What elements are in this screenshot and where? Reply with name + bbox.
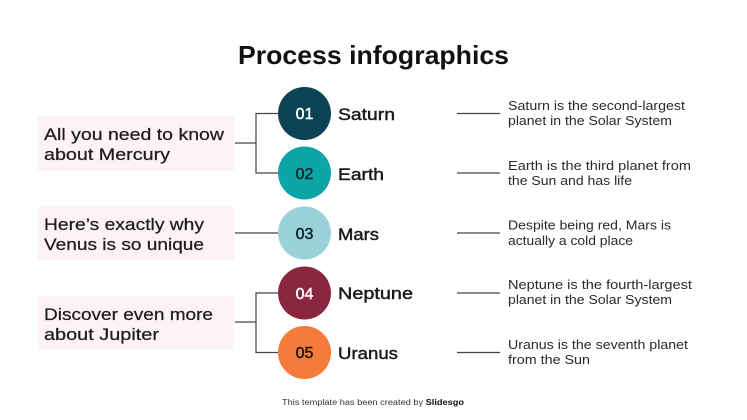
connector: Jupiter to Neptune and Uranus — [235, 293, 278, 352]
connector: Venus to Mars — [235, 232, 278, 234]
panel: Jupiter callout — [38, 296, 234, 350]
description: Neptune: Neptune is the fourth-largest — [508, 277, 692, 292]
panel: Mercury callout: All you need to know — [44, 125, 225, 144]
panel: Mercury callout — [38, 116, 234, 171]
description: Mars: actually a cold place — [508, 233, 633, 248]
description: Neptune: planet in the Solar System — [508, 292, 672, 307]
description: Mars — [457, 218, 672, 248]
description: Neptune — [457, 277, 692, 307]
title: Process infographics — [238, 40, 509, 70]
step 04: Neptune: Neptune — [338, 284, 413, 303]
panel: Venus callout: Venus is so unique — [44, 235, 204, 254]
step 02: Earth: Earth — [338, 165, 384, 184]
step 03: Mars: Mars — [338, 225, 379, 244]
step 05: Uranus: 05 — [296, 345, 314, 362]
panel: Mercury callout: about Mercury — [44, 145, 171, 164]
description: Uranus — [457, 337, 688, 367]
description: Earth: Earth is the third planet from — [508, 158, 691, 173]
step 03: Mars: 03 — [296, 226, 314, 243]
panel: Venus callout — [38, 206, 234, 260]
panel: Jupiter callout: Discover even more — [44, 305, 213, 324]
description: Saturn: planet in the Solar System — [508, 113, 672, 128]
panel: Jupiter callout: about Jupiter — [44, 325, 159, 344]
panel: Venus callout: Here’s exactly why — [44, 215, 205, 234]
step 02: Earth — [278, 146, 384, 200]
step 04: Neptune: 04 — [296, 286, 314, 303]
step 01: Saturn: 01 — [296, 106, 314, 123]
description: Uranus: Uranus is the seventh planet — [508, 337, 688, 352]
step 01: Saturn: Saturn — [338, 105, 395, 124]
description: Saturn: Saturn is the second-largest — [508, 98, 685, 113]
step 03: Mars — [278, 206, 379, 260]
description: Earth: the Sun and has life — [508, 173, 632, 188]
description: Earth — [457, 158, 691, 188]
connector: Mercury to Saturn and Earth — [235, 114, 278, 173]
footer credit: This template has been created by Slidesgo — [282, 398, 464, 407]
step 02: Earth: 02 — [296, 166, 314, 183]
step 05: Uranus — [278, 326, 398, 379]
description: Uranus: from the Sun — [508, 352, 590, 367]
step 04: Neptune — [278, 266, 413, 320]
step 05: Uranus: Uranus — [338, 344, 398, 363]
step 01: Saturn — [278, 87, 395, 140]
description: Mars: Despite being red, Mars is — [508, 218, 672, 232]
description: Saturn — [457, 98, 685, 128]
